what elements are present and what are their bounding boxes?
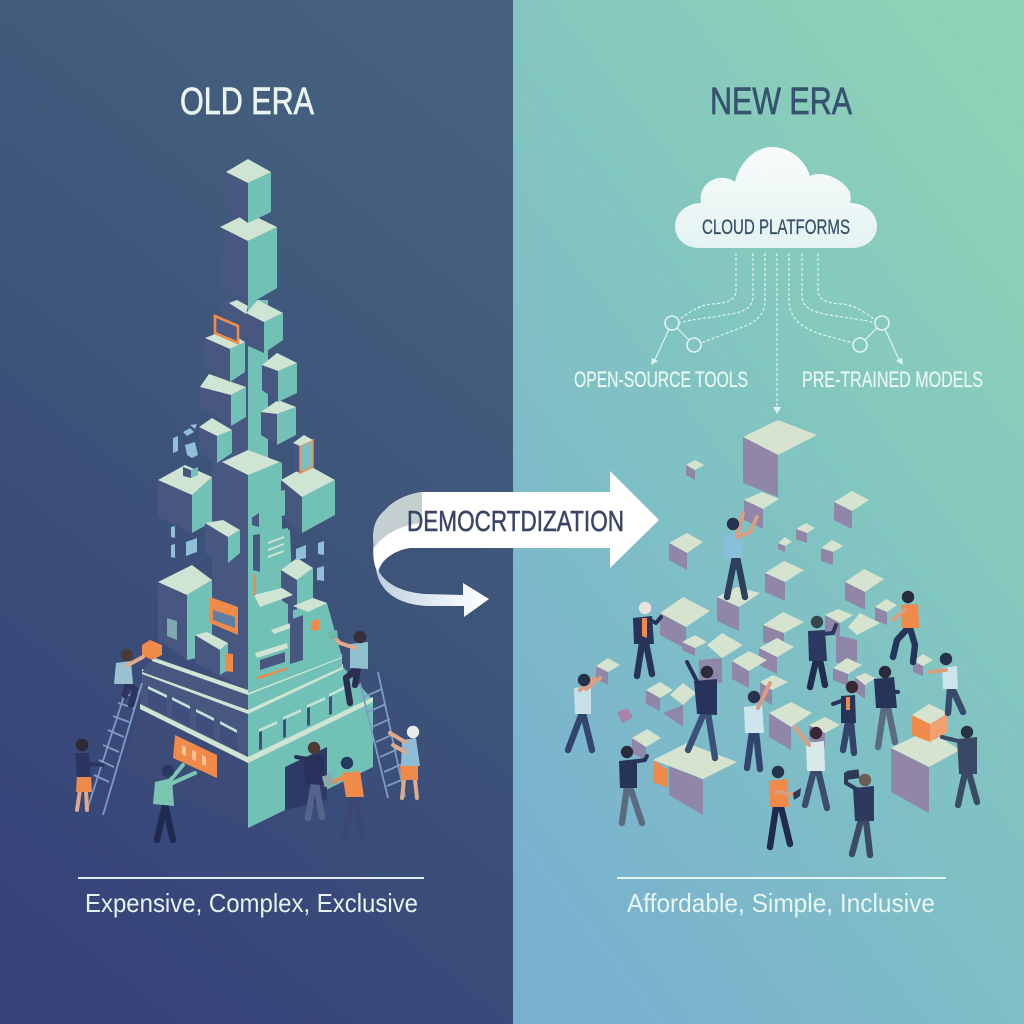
- person: light shirt with arm raised: [744, 683, 770, 769]
- person: woman with white hair: [390, 726, 420, 798]
- person: man on right ladder: [328, 630, 368, 703]
- illustration: monolithic tower: [123, 159, 373, 828]
- person: right side pushing block: [942, 726, 977, 805]
- person: man in suit: [874, 666, 898, 747]
- ladder: left: [88, 683, 142, 815]
- arrow: shaded fold: [373, 492, 422, 548]
- arrow: main band: [373, 471, 659, 573]
- arrow: democratization: [373, 471, 659, 617]
- title: old era: OLD ERA: [180, 81, 315, 123]
- tower lower blocks: [158, 455, 342, 693]
- person: woman in white shirt: [795, 727, 827, 808]
- ladder: right: [360, 672, 405, 798]
- arrow: cloud to blocks: [773, 253, 781, 414]
- person: back view with tablet: [846, 769, 874, 855]
- person: orange shirt with tablet: [322, 757, 364, 837]
- node: left pair: [651, 316, 701, 365]
- cloud label: CLOUD PLATFORMS: [702, 216, 850, 239]
- label: open-source tools: OPEN-SOURCE TOOLS: [574, 367, 748, 392]
- node: right pair: [853, 316, 903, 365]
- person: pushing orange sign: [153, 735, 217, 840]
- caption: new era: Affordable, Simple, Inclusive: [627, 888, 935, 918]
- panel: new era background: [513, 0, 1024, 1024]
- person: reaching up on block: [724, 513, 757, 597]
- title: new era: NEW ERA: [710, 81, 853, 123]
- rule: old era: [78, 877, 424, 879]
- person: orange shirt jogging: [893, 591, 919, 662]
- icon: orange frame on tower: [215, 316, 238, 343]
- icon: orange door on tower: [293, 435, 313, 473]
- person: older man in suit: [633, 602, 661, 676]
- person: woman in orange skirt: [75, 739, 103, 810]
- panel: old era background: [0, 0, 513, 1024]
- person: arm raised on platform: [687, 662, 717, 758]
- arrow label: DEMOCRTDIZATION: [407, 506, 624, 538]
- floating fragments: [171, 424, 324, 581]
- person: ladder climber with box: [114, 640, 162, 705]
- caption: old era: Expensive, Complex, Exclusive: [85, 888, 418, 918]
- person: woman with laptop: [833, 681, 858, 753]
- tower base: [123, 654, 373, 828]
- person: figure at door: [296, 742, 326, 818]
- connectors: cloud to tools and models: [651, 253, 903, 414]
- arrow: lower return band: [376, 566, 489, 617]
- cloud: cloud platforms: [675, 147, 877, 248]
- illustration: scattered building blocks: [596, 420, 960, 815]
- people: old era: [75, 630, 420, 840]
- person: carrying cube left: [568, 674, 600, 750]
- people: new era: [568, 513, 977, 855]
- rule: new era: [617, 877, 946, 879]
- person: running light shirt: [930, 653, 963, 713]
- tower upper blocks: [199, 159, 297, 520]
- person: orange shirt with tablet: [769, 766, 801, 847]
- person: navy holding cube overhead: [619, 746, 647, 823]
- person: dark jacket stacking: [808, 616, 836, 687]
